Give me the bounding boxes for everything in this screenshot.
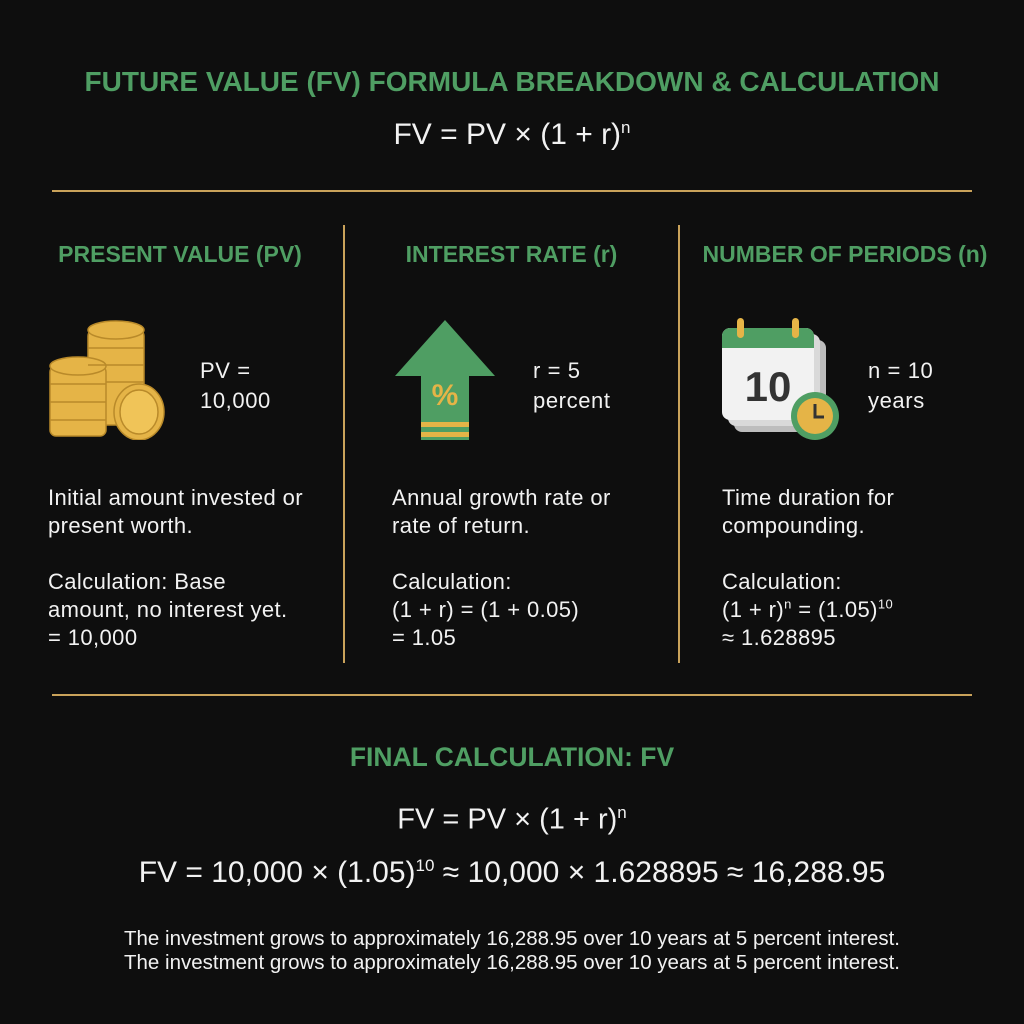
summary text — [124, 927, 900, 974]
panel: interest rate — [392, 241, 617, 650]
heading: r: INTEREST RATE (r) — [406, 241, 617, 267]
description: n: ≈ 1.628895 — [722, 625, 836, 650]
description: n — [722, 485, 894, 650]
value: n: years — [868, 388, 925, 413]
description: n: compounding. — [722, 513, 865, 538]
description: PV: Initial amount invested or — [48, 485, 303, 510]
description: n: (1 + r)n = (1.05)10 — [722, 597, 893, 622]
description: r: (1 + r) = (1 + 0.05) — [392, 597, 579, 622]
title: FUTURE VALUE (FV) FORMULA BREAKDOWN & CALCULATION — [85, 66, 939, 97]
value: r: r = 5 — [533, 358, 581, 383]
icon: calendar with clock: 10 — [745, 363, 791, 410]
formula: final: FV = PV × (1 + r)n — [397, 803, 627, 836]
description: n: Calculation: — [722, 569, 842, 594]
heading: n: NUMBER OF PERIODS (n) — [703, 241, 987, 267]
description: r: Annual growth rate or — [392, 485, 611, 510]
description: r: = 1.05 — [392, 625, 456, 650]
description: PV: Calculation: Base — [48, 569, 226, 594]
summary text: The investment grows to approximately 16,288.95 over 10 years at 5 percent interest. — [124, 951, 900, 974]
formula: FV = PV × (1 + r)n — [393, 118, 631, 151]
icon: arrow with percent: % — [432, 379, 458, 412]
panel: present value — [48, 241, 303, 650]
panel: periods — [703, 241, 987, 650]
description: PV: = 10,000 — [48, 625, 137, 650]
description: PV: amount, no interest yet. — [48, 597, 288, 622]
description: r — [392, 485, 611, 650]
description: n: Time duration for — [722, 485, 894, 510]
value: n — [868, 358, 933, 413]
value: PV: PV = — [200, 358, 251, 383]
value: PV — [200, 358, 271, 413]
value: r — [533, 358, 611, 413]
description: r: Calculation: — [392, 569, 512, 594]
value: n: n = 10 — [868, 358, 933, 383]
value: r: percent — [533, 388, 611, 413]
description: PV — [48, 485, 303, 650]
description: r: rate of return. — [392, 513, 530, 538]
heading: PV: PRESENT VALUE (PV) — [58, 241, 302, 267]
summary text: The investment grows to approximately 16,288.95 over 10 years at 5 percent interest. — [124, 927, 900, 950]
icon: coins — [49, 320, 165, 440]
calculation: result: FV = 10,000 × (1.05)10 ≈ 10,000 × 1.628895 ≈ 16,288.95 — [139, 856, 885, 889]
description: PV: present worth. — [48, 513, 193, 538]
value: PV: 10,000 — [200, 388, 271, 413]
icon: calendar with clock — [722, 318, 839, 440]
icon: arrow with percent — [395, 320, 495, 440]
heading: final calculation: FINAL CALCULATION: FV — [350, 742, 674, 772]
